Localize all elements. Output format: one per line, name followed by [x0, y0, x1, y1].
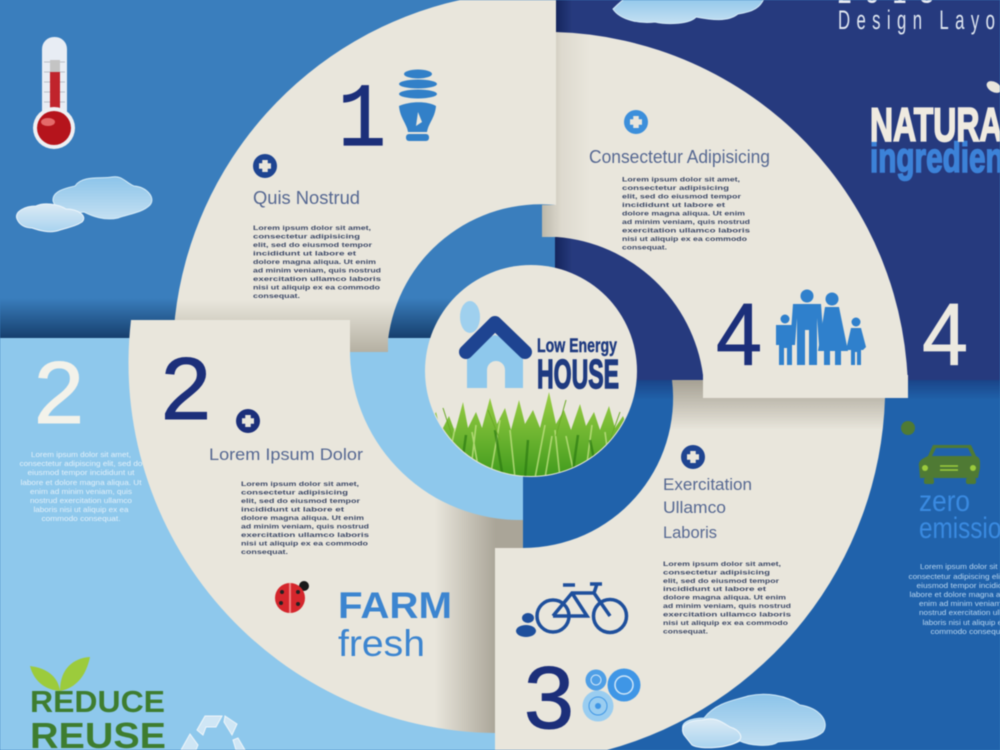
text block: segment 4: dolore magna aliqua. Ut enim	[622, 210, 745, 218]
icon: cloud bottom	[683, 694, 825, 748]
icon: plus segment 4	[624, 110, 648, 134]
text block: left white: consectetur adipiscing elit, sed do	[20, 459, 142, 468]
heading: exercitation ullamco laboris: Laboris	[663, 523, 717, 542]
icon: plus segment 2	[236, 409, 260, 433]
icon: plus segment 1	[253, 154, 277, 178]
background: top-right quadrant	[555, 0, 1000, 380]
text block: segment 3: consequat.	[663, 628, 708, 636]
text block: left white	[20, 450, 142, 523]
text block: segment 2: Lorem ipsum dolor sit amet,	[241, 481, 359, 488]
text: low energy: Low Energy	[537, 336, 617, 357]
text block: left white: eiusmod tempor incididunt ut	[28, 468, 135, 477]
number 2: 2	[161, 339, 211, 438]
text block: right	[908, 562, 1000, 636]
text block: segment 3: nisi ut aliquip ex ea commodo	[663, 620, 788, 627]
number 1: 1	[338, 71, 386, 173]
number 4 white: 4	[922, 285, 968, 384]
icon: car	[901, 421, 980, 484]
background: bottom-left quadrant	[0, 338, 524, 750]
number 2 white: 2	[34, 343, 84, 442]
text block: segment 3	[663, 561, 791, 636]
text block: segment 2	[241, 481, 369, 556]
text block: segment 4: exercitation ullamco laboris	[622, 228, 750, 234]
text: house: HOUSE	[537, 351, 619, 397]
text block: segment 3: exercitation ullamco laboris	[663, 612, 791, 618]
background shadow: top-left band	[0, 298, 556, 338]
heading: exercitation ullamco laboris	[663, 475, 752, 542]
icon: cloud top	[613, 0, 765, 24]
text block: left white: commodo consequat.	[42, 514, 120, 523]
text block: segment 3: incididunt ut labore et	[663, 586, 767, 593]
icon: house body	[467, 335, 523, 388]
icon: ladybird	[275, 581, 309, 613]
icon: clouds left	[17, 177, 152, 232]
text block: segment 4: incididunt ut labore et	[622, 202, 726, 209]
text block: segment 1: consequat.	[253, 293, 300, 300]
text: reduce: REDUCE	[30, 684, 165, 719]
icon: thermometer	[33, 37, 75, 149]
heading: quis nostrud: Quis Nostrud	[253, 188, 360, 208]
text block: segment 4: elit, sed do eiusmod tempor	[622, 194, 742, 200]
icon: light bulb	[399, 70, 437, 141]
panel: segment 4	[542, 32, 908, 398]
icon: house roof	[466, 323, 525, 352]
background: bottom-right quadrant	[523, 380, 1000, 750]
text block: segment 2: nisi ut aliquip ex ea commodo	[241, 540, 368, 548]
panel: segment 1	[172, 0, 556, 352]
heading: consectetur adipisicing: Consectetur Adipisicing	[589, 147, 770, 167]
heading: exercitation ullamco laboris: Ullamco	[663, 498, 726, 517]
text block: segment 3: Lorem ipsum dolor sit amet,	[663, 561, 781, 568]
text block: segment 1: ad minim veniam, quis nostrud	[253, 268, 381, 274]
icon: plus segment 3	[681, 445, 705, 469]
text block: segment 4: Lorem ipsum dolor sit amet,	[622, 176, 740, 184]
icon: green leaves	[30, 657, 90, 691]
number 4: 4	[716, 285, 762, 384]
icon: house leaf	[460, 301, 480, 333]
text block: segment 1: dolore magna aliqua. Ut enim	[253, 259, 376, 266]
text block: left white: Lorem ipsum dolor sit amet,	[31, 450, 131, 459]
text: fresh: fresh	[338, 623, 425, 664]
text block: segment 3: dolore magna aliqua. Ut enim	[663, 594, 786, 602]
text block: segment 3: ad minim veniam, quis nostrud	[663, 603, 791, 610]
text block: segment 4: ad minim veniam, quis nostrud	[622, 219, 750, 226]
text block: right: commodo consequat.	[930, 627, 1000, 636]
text block: segment 4	[622, 176, 750, 252]
text block: segment 4: consectetur adipisicing	[622, 185, 729, 192]
center circle	[425, 265, 640, 478]
icon: bicycle	[537, 584, 626, 632]
heading: lorem ipsum dolor: Lorem Ipsum Dolor	[209, 445, 363, 464]
text block: segment 2: consectetur adipisicing	[241, 490, 348, 496]
text block: segment 1: incididunt ut labore et	[253, 250, 357, 258]
text block: segment 4: consequat.	[622, 244, 667, 252]
text block: segment 2: elit, sed do eiusmod tempor	[241, 498, 361, 505]
background: top-left quadrant	[0, 0, 556, 338]
text block: segment 1: elit, sed do eiusmod tempor	[253, 242, 373, 249]
panel: segment 2	[128, 320, 523, 733]
text block: segment 2: ad minim veniam, quis nostrud	[241, 524, 369, 530]
text block: segment 3: elit, sed do eiusmod tempor	[663, 578, 780, 585]
text block: segment 1: consectetur adipisicing	[253, 234, 360, 240]
text block: segment 2: consequat.	[241, 549, 288, 556]
text: zero: zero	[919, 485, 970, 518]
icon: bicycle leaf	[516, 613, 536, 637]
text block: segment 3: consectetur adipisicing	[663, 570, 770, 576]
heading: exercitation ullamco laboris: Exercitation	[663, 475, 752, 494]
background shadow: bottom-right band	[523, 380, 1000, 400]
text block: left white: nostrud exercitation ullamco	[30, 496, 132, 505]
text block: segment 4: nisi ut aliquip ex ea commodo	[622, 236, 747, 243]
background shadow: top-right edge	[555, 0, 572, 380]
text block: segment 1	[253, 225, 381, 300]
text: farm: FARM	[338, 585, 452, 626]
text block: left white: labore et dolore magna aliqua. Ut	[20, 478, 142, 487]
number 3: 3	[524, 648, 574, 747]
text block: segment 1: exercitation ullamco laboris	[253, 276, 381, 283]
icon: small leaf	[985, 79, 1000, 95]
panel: segment 4 tab	[703, 375, 908, 398]
text block: segment 2: dolore magna aliqua. Ut enim	[241, 515, 364, 522]
text block: segment 2: incididunt ut labore et	[241, 506, 345, 514]
text block: segment 1: Lorem ipsum dolor sit amet,	[253, 225, 371, 232]
icon: gears	[582, 668, 640, 722]
text block: left white: laboris nisi ut aliquip ex ea	[34, 505, 128, 514]
text block: left white: enim ad minim veniam, quis	[30, 487, 132, 496]
text block: segment 1: nisi ut aliquip ex ea commodo	[253, 284, 380, 292]
icon: recycle arrows	[181, 716, 245, 750]
text block: segment 2: exercitation ullamco laboris	[241, 532, 369, 539]
panel: segment 3	[495, 380, 890, 750]
icon: family	[776, 290, 866, 365]
grass	[434, 392, 625, 477]
